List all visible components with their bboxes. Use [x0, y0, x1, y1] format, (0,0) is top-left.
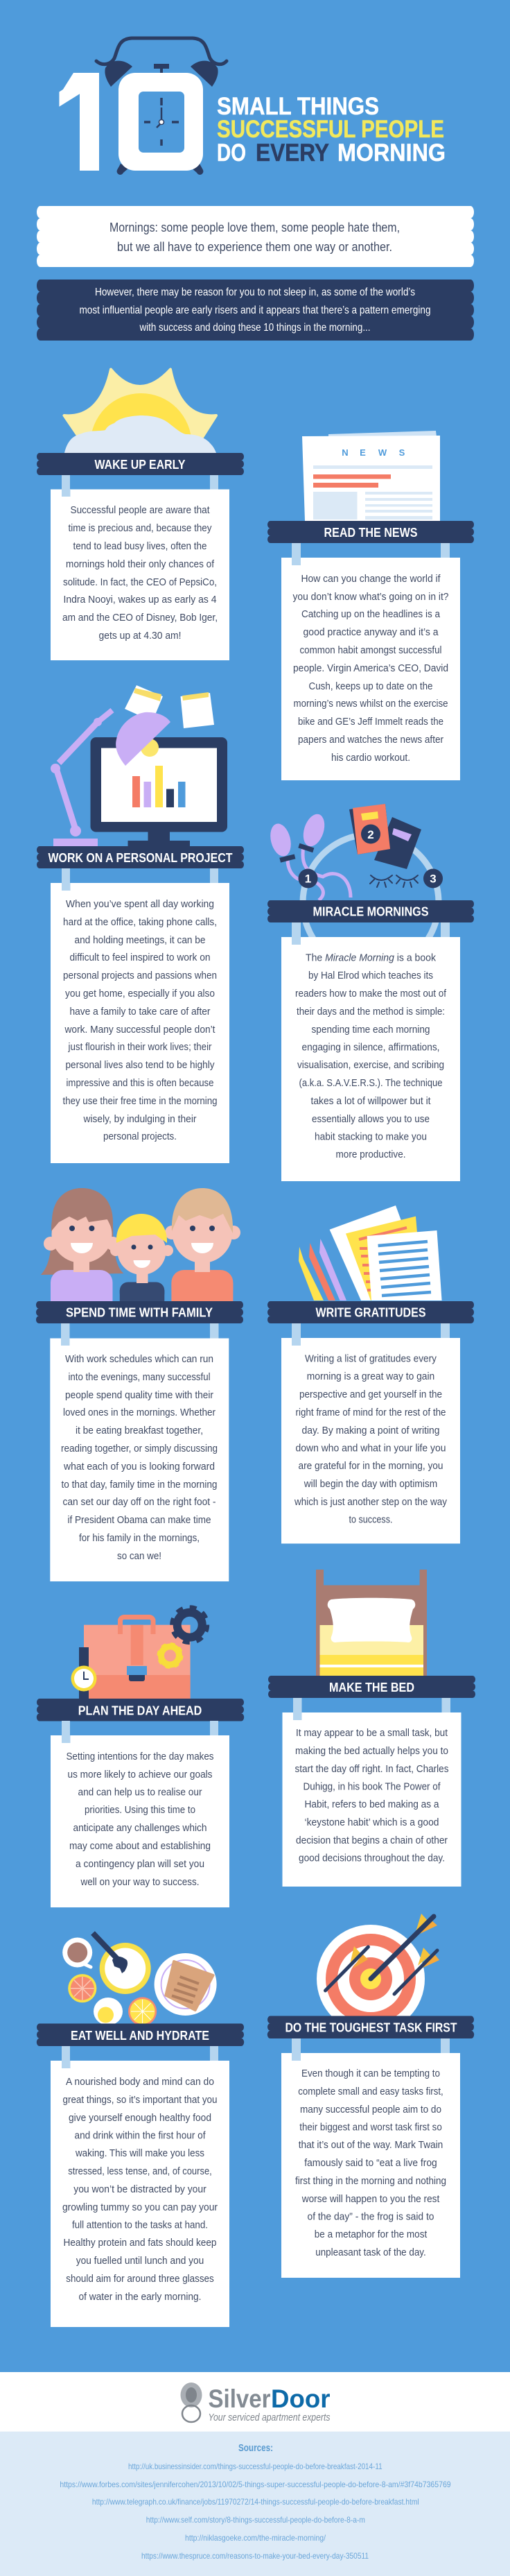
text card: mornings hold their only chances of: [66, 558, 215, 570]
text card: they use their free time in the morning: [62, 1095, 218, 1107]
source links: https://www.thespruce.com/reasons-to-make-your-bed-every-day-350511: [141, 2551, 369, 2561]
logo: lion door knocker: [180, 2382, 202, 2422]
icon: earphones, books, sleeping eyes: 1: [305, 873, 311, 885]
title text: SUCCESSFUL PEOPLE: [217, 116, 444, 143]
text card: you don’t know what’s going on in it?: [292, 591, 449, 603]
text card: should aim for around three glasses: [66, 2273, 214, 2285]
text card: if President Obama can make time: [68, 1514, 211, 1526]
text card: what each of you is looking forward: [63, 1461, 215, 1472]
text card: It may appear to be a small task, but: [296, 1727, 448, 1739]
text card: [281, 1338, 460, 1544]
source links: http://www.telegraph.co.uk/finance/jobs/11970272/14-things-successful-people-do-before-breakfast.html: [92, 2497, 419, 2507]
icon: briefcase, gears and watch: [71, 1608, 207, 1699]
text card: personal projects and passions when: [63, 970, 217, 981]
intro panel: dark: [37, 280, 474, 341]
icon: earphones, books, sleeping eyes: [270, 804, 443, 937]
banner: DO THE TOUGHEST TASK FIRST: [285, 2021, 457, 2035]
clock face: [144, 98, 179, 146]
intro panel: white: [37, 206, 474, 267]
text card: personal projects.: [103, 1131, 177, 1142]
text card: of water in the early morning.: [79, 2291, 201, 2303]
text card: their days and the method is simple:: [297, 1006, 445, 1017]
mother: [41, 1188, 123, 1301]
source links: [60, 2462, 451, 2561]
text card: [50, 1338, 229, 1581]
card tab strips: [292, 2038, 450, 2053]
card tab strips: [292, 1323, 450, 1338]
title text: DO: [217, 139, 246, 166]
text card: perspective and get yourself in the: [299, 1389, 442, 1400]
text card: unpleasant task of the day.: [315, 2247, 426, 2258]
text card: and drink within the first hour of: [75, 2129, 206, 2142]
child: [110, 1214, 173, 1301]
intro panel: white: Mornings: some people love them, some people hate them,: [109, 221, 400, 234]
footer: logo band: [0, 2372, 510, 2432]
text card: waking. This will make you less: [75, 2147, 204, 2159]
text card: decision that begins a chain of other: [296, 1835, 448, 1846]
icon: sun and cloud: [62, 368, 218, 453]
text card: right frame of mind for the rest of the: [295, 1407, 446, 1418]
banner: EAT WELL AND HYDRATE: [71, 2029, 209, 2043]
text card: start the day off right. In fact, Charles: [295, 1763, 449, 1775]
text card: Even though it can be tempting to: [301, 2068, 440, 2079]
text card: essentially allows you to use: [312, 1113, 430, 1125]
text card: Cush, keeps up to date on the: [309, 680, 432, 692]
card tab strips: [61, 1323, 219, 1339]
text card: solitude. In fact, the CEO of PepsiCo,: [63, 576, 217, 588]
text card: may come about and establishing: [69, 1840, 211, 1852]
text card: famously said to “eat a live frog: [304, 2157, 437, 2169]
text card: by Hal Elrod which teaches its: [308, 970, 433, 981]
icon: family of three: [41, 1188, 240, 1301]
text card: [51, 1735, 229, 1907]
title text: SMALL THINGS: [217, 93, 379, 120]
panel: do the toughest task first: [267, 1914, 474, 2278]
panel: write gratitudes: [267, 1205, 474, 1544]
icon: earphones, books, sleeping eyes: 3: [430, 873, 437, 885]
text card: [281, 558, 460, 780]
icon: newspaper: S: [399, 447, 405, 458]
banner: [37, 453, 244, 475]
text card: personal lives also tend to be highly: [65, 1059, 215, 1071]
icon: earphones, books, sleeping eyes: 2: [367, 828, 374, 841]
text card: morning is a great way to gain: [307, 1371, 434, 1382]
text card: readers how to make the most out of: [295, 988, 447, 999]
banner: [37, 846, 244, 868]
text card: priorities. Using this time to: [85, 1804, 195, 1816]
text card: When you’ve spent all day working: [66, 898, 214, 910]
panel: read the news: [267, 431, 474, 780]
logo wordmark: [208, 2385, 331, 2423]
source links: https://www.forbes.com/sites/jennifercohen/2013/10/02/5-things-super-successful-people-do-before-8-am/#3f74b7365769: [60, 2480, 451, 2489]
text card: Setting intentions for the day makes: [67, 1751, 213, 1762]
coffee cup: [62, 1938, 92, 1967]
text card: it be eating breakfast together,: [76, 1425, 203, 1436]
text card: can set our day off on the right foot -: [62, 1496, 216, 1508]
text card: Habit, refers to bed making as a: [305, 1798, 439, 1810]
title text: MORNING: [337, 139, 446, 166]
logo wordmark: Door: [271, 2385, 330, 2413]
banner: [267, 2016, 474, 2038]
text card: that it’s out of the way. Mark Twain: [299, 2139, 443, 2151]
intro panel: dark: However, there may be reason for you to not sleep in, as some of the world’s: [95, 286, 415, 298]
text card: worse will happen to you the rest: [301, 2193, 440, 2205]
text card: you won’t be distracted by your: [73, 2183, 206, 2195]
text card: people. Virgin America’s CEO, David: [293, 662, 448, 674]
text card: to success.: [349, 1513, 392, 1526]
icon: newspaper: W: [378, 447, 387, 458]
text card: takes a lot of willpower but it: [310, 1095, 431, 1107]
text card: to that day, family time in the morning: [61, 1479, 218, 1491]
panel: eat well and hydrate: [37, 1933, 244, 2327]
banner: [267, 1301, 474, 1323]
porridge bowl: [93, 1933, 151, 1994]
text card: you get home, especially if you also: [65, 988, 215, 999]
text card: anticipate any challenges which: [73, 1822, 206, 1834]
text card: [51, 2061, 229, 2327]
numeral 10: 0: [123, 60, 198, 192]
banner: WORK ON A PERSONAL PROJECT: [49, 851, 233, 865]
grapefruit slice: [68, 1974, 96, 2002]
text card: [281, 2053, 460, 2278]
text card: be a metaphor for the most: [315, 2229, 428, 2240]
numeral 10: [59, 73, 203, 171]
toast on plate: [155, 1953, 217, 2016]
card tab strips: [62, 475, 218, 490]
text card: bike and GE’s Jeff Immelt reads the: [298, 716, 443, 728]
icon: newspaper: N: [342, 447, 349, 458]
text card: us more likely to achieve our goals: [68, 1769, 212, 1780]
text card: Healthy protein and fats should keep: [64, 2237, 216, 2249]
intro panel: dark: most influential people are early risers and it appears that there’s a pattern emerging: [79, 304, 431, 316]
banner: MIRACLE MORNINGS: [313, 904, 428, 918]
text card: ‘keystone habit’ which is a good: [305, 1817, 439, 1828]
text card: which is just another step on the way: [294, 1496, 447, 1508]
text card: loved ones in the mornings. Whether: [63, 1407, 216, 1418]
text card: more productive.: [335, 1149, 406, 1160]
text card: full attention to the tasks at hand.: [72, 2219, 208, 2231]
sources heading: Sources:: [238, 2442, 273, 2454]
text card: so can we!: [117, 1550, 161, 1562]
text card: stressed, less tense, and, of course,: [68, 2165, 212, 2177]
text card: spending time each morning: [312, 1024, 430, 1036]
text card: How can you change the world if: [301, 573, 441, 585]
text card: their biggest and worst task first so: [299, 2121, 442, 2133]
boiled egg: [94, 1998, 123, 2025]
text card: are grateful for in the morning, you: [298, 1460, 443, 1472]
icon: desk with lamp and monitor: [51, 685, 227, 847]
icon: breakfast items: [62, 1933, 217, 2026]
text card: Catching up on the headlines is a: [301, 608, 441, 620]
icon: pencils and papers: [299, 1205, 442, 1300]
text card: Successful people are aware that: [71, 504, 210, 516]
banner: WAKE UP EARLY: [94, 458, 186, 472]
card tab strips: [293, 1698, 450, 1712]
banner: READ THE NEWS: [324, 526, 417, 540]
intro panel: dark: with success and doing these 10 things in the morning...: [139, 322, 371, 334]
text card: gets up at 4.30 am!: [98, 630, 182, 642]
banner: [37, 1699, 244, 1721]
text card: and can help us to realise our: [78, 1787, 202, 1798]
text card: impressive and this is often because: [67, 1077, 213, 1089]
banner: MAKE THE BED: [329, 1681, 414, 1694]
card tab strips: [292, 922, 450, 937]
text card: growling tummy so you can pay your: [62, 2201, 218, 2213]
text card: of the day” - the frog is said to: [308, 2211, 434, 2222]
text card: just flourish in their work lives; their: [68, 1041, 211, 1053]
text card: and holding meetings, it can be: [75, 934, 205, 946]
text card: [283, 1712, 461, 1887]
text card: papers and watches the news after: [298, 734, 443, 746]
text card: well on your way to success.: [80, 1876, 200, 1888]
card tab strips: [62, 1721, 218, 1735]
text card: people spend quality time with their: [65, 1389, 213, 1401]
text card: morning’s news whilst on the exercise: [294, 698, 448, 710]
alarm clock handle and bells: [96, 38, 227, 175]
card tab strips: [62, 2046, 218, 2061]
text card: down who and what in your life you: [295, 1443, 446, 1454]
text card: Duhigg, in his book The Power of: [304, 1781, 441, 1792]
banner: WRITE GRATITUDES: [316, 1305, 425, 1319]
banner: [267, 521, 474, 543]
source links: http://niklasgoeke.com/the-miracle-morning/: [185, 2533, 326, 2543]
text card: work. Many successful people don’t: [64, 1024, 216, 1036]
banner: [267, 900, 474, 922]
text card: will begin the day with optimism: [304, 1478, 437, 1490]
panel: plan the day ahead: [37, 1608, 244, 1907]
text card: difficult to feel inspired to work on: [69, 952, 211, 963]
panel: wake up early: [37, 369, 244, 660]
text card: day. By making a point of writing: [302, 1425, 439, 1436]
icon: bed with pillow: [316, 1570, 427, 1676]
icon: target with arrows: [317, 1914, 439, 2016]
text card: engaging in silence, affirmations,: [302, 1042, 439, 1053]
panel: work on a personal project: [37, 685, 244, 1163]
logo wordmark: Silver: [208, 2385, 270, 2413]
icon: newspaper: E: [360, 447, 366, 458]
text card: am and the CEO of Disney, Bob Iger,: [62, 612, 218, 624]
text card: A nourished body and mind can do: [66, 2076, 214, 2088]
footer: sources panel: [0, 2432, 510, 2576]
text card: give yourself enough healthy food: [69, 2112, 211, 2124]
source links: http://www.self.com/story/8-things-successful-people-do-before-8-a-m: [146, 2515, 365, 2525]
numeral 10: 1: [50, 47, 126, 200]
text card: [51, 883, 229, 1163]
arrows: [326, 1914, 439, 1994]
text card: you fuelled until lunch and you: [76, 2255, 204, 2267]
text card: (a.k.a. S.A.V.E.R.S.). The technique: [299, 1077, 442, 1089]
text card: wisely, by indulging in their: [83, 1113, 197, 1125]
text card: into the evenings, many successful: [68, 1371, 211, 1383]
source links: http://uk.businessinsider.com/things-successful-people-do-before-breakfast-2014-11: [128, 2462, 382, 2471]
text card: for his family in the mornings,: [79, 1532, 200, 1544]
text card: good decisions throughout the day.: [299, 1852, 445, 1864]
card tab strips: [292, 543, 450, 558]
text card: making the bed actually helps you to: [295, 1745, 448, 1757]
banner: PLAN THE DAY AHEAD: [78, 1703, 202, 1717]
card tab strips: [62, 868, 218, 883]
text card: his cardio workout.: [331, 752, 410, 764]
text card: Indra Nooyi, wakes up as early as 4: [64, 594, 216, 606]
title text: [217, 93, 446, 166]
intro panel: white: but we all have to experience them one way or another.: [117, 240, 392, 254]
text card: [51, 489, 229, 660]
text card: tend to lead busy lives, often the: [73, 540, 206, 552]
text card: many successful people aim to do: [300, 2104, 441, 2115]
header: alarm clock title: [59, 36, 445, 175]
banner: [37, 2024, 244, 2046]
banner: [268, 1676, 475, 1698]
text card: [281, 937, 460, 1181]
panel: spend time with family: [36, 1188, 243, 1581]
text card: complete small and easy tasks first,: [298, 2086, 443, 2097]
banner: [36, 1301, 243, 1323]
icon: newspaper: [302, 431, 440, 521]
text card: a contingency plan will set you: [76, 1858, 204, 1870]
text card: The Miracle Morning is a book: [306, 952, 436, 964]
text card: hard at the office, taking phone calls,: [63, 916, 217, 928]
text card: have a family to take care of after: [69, 1006, 211, 1017]
text card: good practice anyway and it’s a: [304, 626, 439, 638]
lemon slice: [128, 1997, 157, 2026]
father: [165, 1188, 240, 1301]
text card: reading together, or simply discussing: [61, 1443, 218, 1454]
text card: Writing a list of gratitudes every: [305, 1353, 437, 1365]
banner: SPEND TIME WITH FAMILY: [66, 1305, 213, 1319]
logo wordmark: Your serviced apartment experts: [208, 2412, 331, 2423]
panel: miracle mornings: [267, 804, 474, 1181]
panel: make the bed: [268, 1570, 475, 1887]
text card: time is precious and, because they: [68, 522, 212, 534]
text card: great things, so it’s important that you: [62, 2094, 218, 2106]
title text: EVERY: [256, 139, 329, 166]
text card: first thing in the morning and nothing: [295, 2175, 446, 2187]
text card: common habit amongst successful: [299, 644, 442, 656]
text card: visualisation, exercise, and scribing: [297, 1059, 444, 1071]
text card: habit stacking to make you: [315, 1131, 427, 1143]
text card: With work schedules which can run: [65, 1353, 213, 1365]
